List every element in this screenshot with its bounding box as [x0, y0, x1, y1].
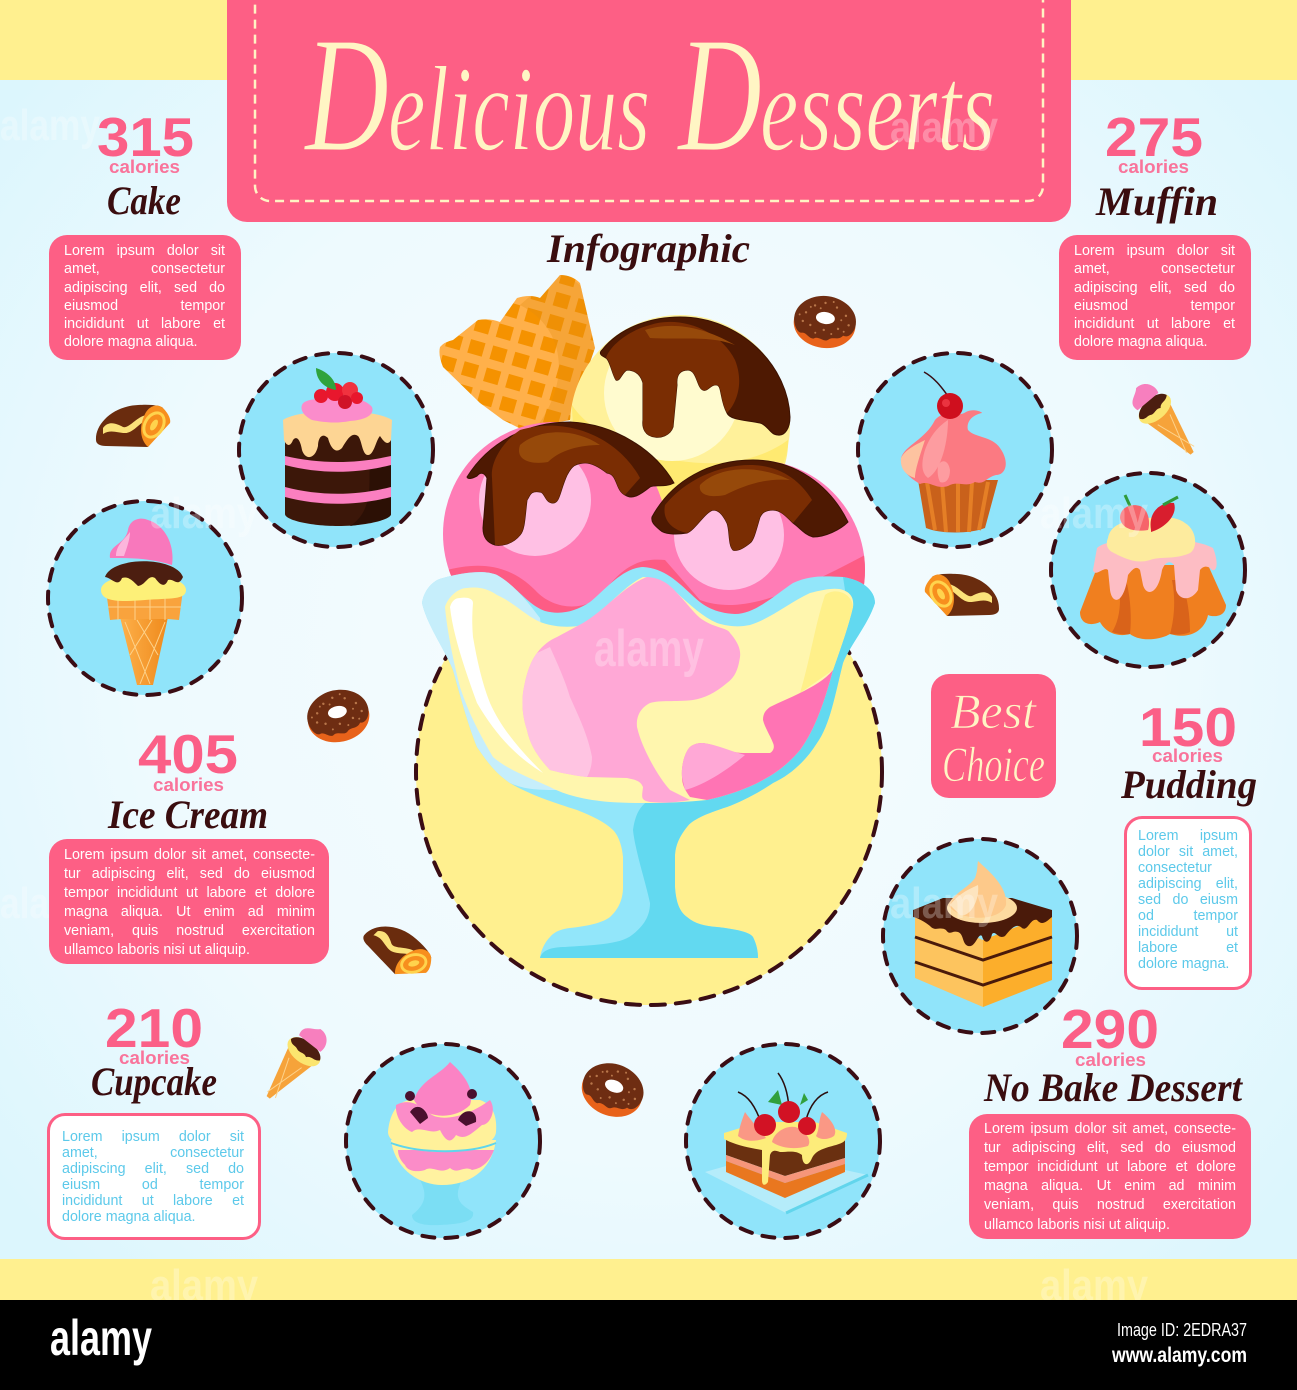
stat: muffin [1095, 106, 1218, 224]
badge: best choice: Choice [942, 736, 1045, 792]
text box: no bake dessert: ullamco laboris nisi ut aliquip. [984, 1217, 1170, 1233]
footer bar [0, 1300, 1297, 1390]
text box: ice cream: Lorem ipsum dolor sit amet, consecte- [64, 847, 315, 863]
stat: ice cream [107, 723, 268, 837]
watermarks: alamy [150, 1261, 258, 1310]
top band right [1070, 0, 1297, 80]
text box: pudding: incididunt ut [1138, 924, 1238, 940]
stat: no bake dessert: 290 [1061, 998, 1159, 1060]
text box: no bake dessert: tempor incididunt ut labore et dolore [984, 1159, 1236, 1175]
text box: cake: Lorem ipsum dolor sit [64, 243, 225, 259]
text box: pudding [1124, 816, 1252, 990]
text box: ice cream [49, 839, 329, 964]
filling right shade [800, 591, 853, 693]
text box: ice cream: ullamco laboris nisi ut aliquip. [64, 942, 250, 958]
watermarks: alamy [594, 620, 704, 678]
text box: no bake dessert [969, 1114, 1251, 1239]
text box: no bake dessert: tur adipiscing elit, sed do eiusmod [984, 1140, 1236, 1156]
stat: muffin: calories [1118, 157, 1189, 177]
stat: no bake dessert: No Bake Dessert [983, 1065, 1244, 1110]
bowl ice cream filling [445, 577, 853, 803]
chocolate: yellow scoop [600, 317, 790, 437]
icon: layered slice [913, 861, 1052, 1007]
icon: pudding [1080, 495, 1226, 639]
circle: pudding [1051, 473, 1245, 667]
icon: small cone left [253, 1018, 336, 1109]
icon: roll left [96, 405, 170, 447]
text box: pudding: labore et [1138, 940, 1238, 956]
big yellow dashed circle [416, 539, 882, 1005]
glass left highlight [422, 572, 560, 790]
stat: cupcake: calories [119, 1048, 190, 1068]
badge: best choice: Best [950, 683, 1037, 739]
stat: muffin: Muffin [1095, 179, 1218, 224]
text box: muffin: dolore magna aliqua. [1074, 334, 1208, 350]
watermarks: alamy [150, 489, 258, 538]
watermarks: alamy [1040, 1261, 1148, 1310]
text box: no bake dessert: magna aliqua. Ut enim ad minim [984, 1178, 1236, 1194]
stat: pudding: 150 [1139, 696, 1237, 758]
circle: ice cream cone [48, 501, 242, 695]
text box: cupcake: Lorem ipsum dolor sit [62, 1129, 244, 1145]
text box: cake: amet, consectetur [64, 261, 225, 277]
glass right shade [540, 577, 875, 958]
icon: muffin [901, 372, 1006, 532]
watermarks: alamy [1040, 489, 1148, 538]
bottom band [0, 1259, 1297, 1300]
stat: ice cream: Ice Cream [107, 792, 268, 837]
stat: ice cream: 405 [138, 723, 238, 785]
text box: cake: eiusmod tempor [64, 298, 225, 314]
text box: cupcake: incididunt ut labore et [62, 1193, 244, 1209]
icon: layer cake [283, 368, 392, 526]
pink scoop right [645, 460, 865, 680]
circle: muffin [858, 353, 1052, 547]
pink scoop left [443, 422, 667, 646]
text box: cake: dolore magna aliqua. [64, 334, 198, 350]
text box: muffin: eiusmod tempor [1074, 298, 1235, 314]
text box: muffin: incididunt ut labore et [1074, 316, 1235, 332]
text box: cake: adipiscing elit, sed do [64, 280, 225, 296]
icon: roll right [925, 574, 999, 616]
text box: muffin: adipiscing elit, sed do [1074, 280, 1235, 296]
footer logo: alamy [50, 1310, 152, 1366]
text box: no bake dessert: Lorem ipsum dolor sit amet, consecte- [984, 1121, 1236, 1137]
stat: cake [97, 106, 194, 223]
icon: donut top [791, 292, 859, 352]
title: D [677, 3, 762, 186]
stat: pudding: Pudding [1120, 762, 1257, 807]
stat: ice cream: calories [153, 775, 224, 795]
footer url: www.alamy.com [1111, 1344, 1247, 1367]
text box: pudding: sed do eiusm [1138, 892, 1238, 908]
text box: cupcake: dolore magna aliqua. [62, 1209, 196, 1225]
icon: donut left [302, 684, 374, 748]
pink swirl [522, 577, 740, 803]
stat: cupcake: 210 [105, 997, 203, 1059]
chocolate: right pink scoop [652, 460, 848, 550]
icon: small cone right [1122, 375, 1207, 466]
title banner [227, 0, 1071, 222]
stat: pudding [1120, 696, 1257, 807]
text box: cake: incididunt ut labore et [64, 316, 225, 332]
text box: cupcake [47, 1113, 261, 1240]
stat: muffin: 275 [1105, 106, 1203, 168]
icon: no bake dessert [705, 1073, 868, 1213]
footer image id: Image ID: 2EDRA37 [1117, 1320, 1247, 1340]
scoop shadow band [448, 556, 865, 614]
icon: donut bottom [574, 1054, 651, 1126]
text box: cupcake: adipiscing elit, sed do [62, 1161, 244, 1177]
text box: ice cream: magna aliqua. Ut enim ad minim [64, 904, 315, 920]
title: elicious [388, 42, 650, 177]
watermarks [0, 101, 1148, 1310]
icon: central ice cream sundae [422, 265, 875, 958]
waffle [439, 275, 595, 428]
watermarks: alamy [890, 879, 998, 928]
title: D [304, 3, 389, 186]
subtitle: Infographic [546, 226, 750, 271]
circle: no bake dessert [686, 1044, 880, 1238]
badge: best choice [931, 674, 1056, 798]
text box: muffin: amet, consectetur [1074, 261, 1235, 277]
glass body and stem [422, 567, 875, 958]
stat: cupcake [91, 997, 217, 1104]
icon: roll bottom [360, 911, 438, 989]
text box: pudding: adipiscing elit, [1138, 876, 1238, 892]
text box: muffin [1059, 235, 1251, 360]
text box: no bake dessert: veniam, quis nostrud exercitation [984, 1197, 1236, 1213]
chocolate: left pink scoop [467, 422, 674, 545]
watermarks: alamy [890, 103, 998, 152]
text box: muffin: Lorem ipsum dolor sit [1074, 243, 1235, 259]
text box: pudding: od tempor [1138, 908, 1238, 924]
icon: ice cream [101, 519, 186, 685]
stat: pudding: calories [1152, 746, 1223, 766]
text box: cake [49, 235, 241, 360]
title: esserts [760, 42, 995, 177]
stat: cake: calories [109, 157, 180, 177]
text box: ice cream: tur adipiscing elit, sed do eiusmod [64, 866, 315, 882]
text box: cupcake: amet, consectetur [62, 1145, 244, 1161]
circle: layered cake [239, 353, 433, 547]
stat: no bake dessert: calories [1075, 1050, 1146, 1070]
circle: sundae [346, 1044, 540, 1238]
stat: cupcake: Cupcake [91, 1059, 217, 1104]
yellow scoop [570, 315, 790, 535]
text box: pudding: dolore magna. [1138, 956, 1229, 972]
top band left [0, 0, 228, 80]
icon: sundae [388, 1062, 496, 1225]
text box: ice cream: veniam, quis nostrud exercitation [64, 923, 315, 939]
text box: cupcake: eiusm od tempor [62, 1177, 244, 1193]
text box: pudding: Lorem ipsum [1138, 828, 1238, 844]
stat: cake: Cake [107, 178, 181, 223]
text box: ice cream: tempor incididunt ut labore et dolore [64, 885, 315, 901]
circle: layered slice [883, 839, 1077, 1033]
stat: no bake dessert [983, 998, 1244, 1110]
watermarks: alamy [0, 879, 100, 928]
watermarks: alamy [0, 101, 100, 150]
text box: pudding: consectetur [1138, 860, 1212, 876]
stat: cake: 315 [97, 106, 194, 168]
text box: pudding: dolor sit amet, [1138, 844, 1238, 860]
